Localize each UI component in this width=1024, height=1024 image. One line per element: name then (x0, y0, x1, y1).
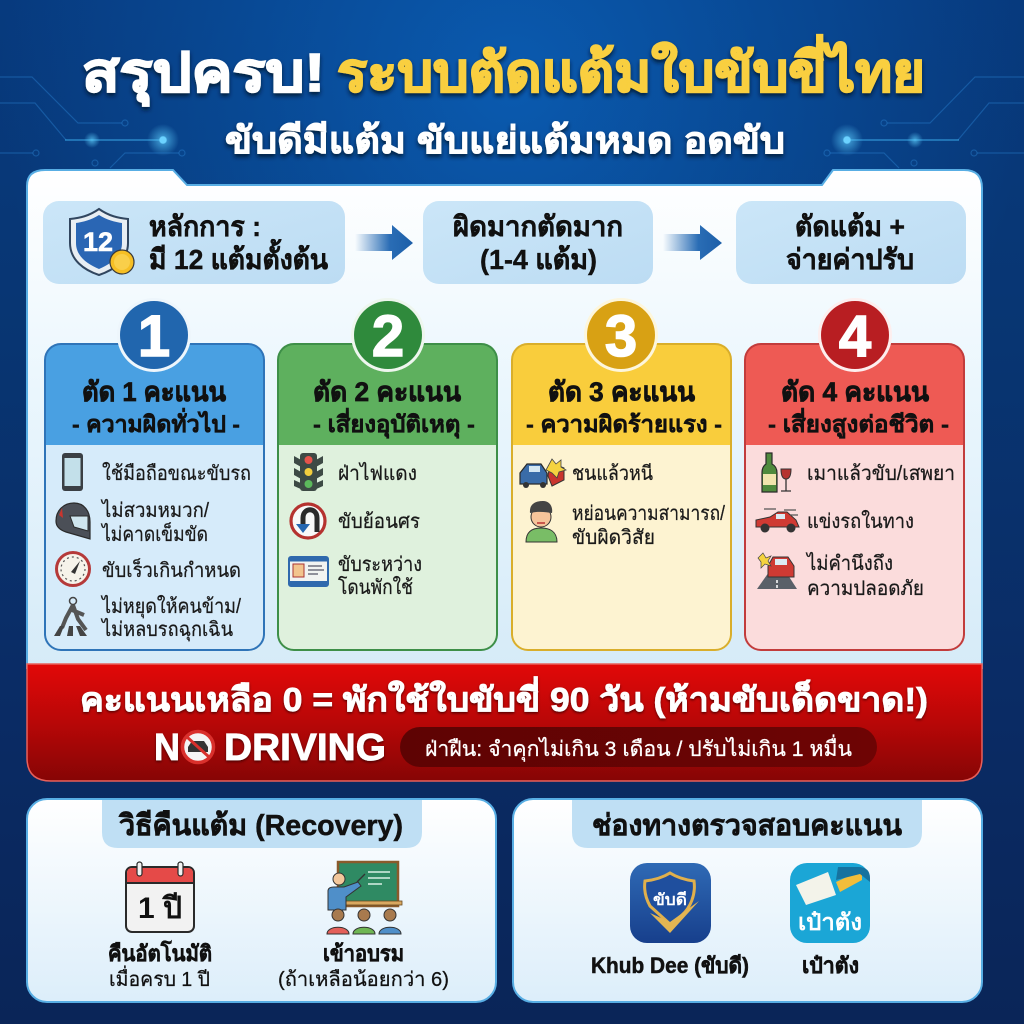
icon: license card (289, 557, 328, 586)
circuit decoration left (0, 77, 185, 168)
badge 2 (351, 298, 425, 372)
arrow 1 (355, 225, 413, 260)
icon: car crash (520, 459, 566, 488)
box: cut points and pay fine: ตัดแต้ม + (795, 211, 905, 242)
box: cut points and pay fine: จ่ายค่าปรับ (786, 244, 914, 275)
card 3: หย่อนความสามารถ/ (572, 503, 725, 525)
auto recovery label: เมื่อครบ 1 ปี (109, 965, 210, 991)
channels heading (572, 800, 922, 848)
subtitle: ขับดีมีแต้ม ขับแย่แต้มหมด อดขับ (225, 120, 785, 161)
card 4: เมาแล้วขับ/เสพยา (807, 463, 955, 485)
recovery heading (102, 800, 422, 848)
no driving sign: N (154, 727, 180, 769)
card 1: ไม่หลบรถฉุกเฉิน (100, 618, 233, 642)
badge 1: 1 (138, 304, 170, 369)
icon: speedometer (56, 552, 90, 586)
banner: zero points (27, 664, 982, 781)
badge 4 (818, 298, 892, 372)
card 1: ตัด 1 คะแนน (82, 377, 227, 407)
card 4: ไม่คำนึงถึง (805, 552, 893, 575)
principle box: มี 12 แต้มตั้งต้น (149, 238, 328, 275)
principle box: หลักการ : (149, 211, 261, 242)
icon: pedestrian crossing (54, 598, 87, 636)
icon: Paotang app (790, 863, 870, 943)
title (82, 34, 925, 107)
box: wrong more cut more (423, 201, 653, 284)
panel: check channels (513, 799, 982, 1002)
card 4: ความปลอดภัย (807, 578, 924, 600)
card 4: - เสี่ยงสูงต่อชีวิต - (768, 407, 949, 439)
icon: Khub Dee app: ขับดี (653, 890, 687, 909)
card 4: แข่งรถในทาง (807, 510, 914, 533)
banner headline: คะแนนเหลือ 0 = พักใช้ใบขับขี่ 90 วัน (ห้ามขับเด็ดขาด!) (80, 676, 928, 718)
auto recovery label: คืนอัตโนมัติ (108, 940, 212, 966)
icon: shield 12: 12 (83, 227, 113, 257)
card 3 (512, 298, 731, 650)
card 1: ขับเร็วเกินกำหนด (102, 557, 241, 582)
channels heading: ช่องทางตรวจสอบคะแนน (592, 810, 902, 842)
card 1: ไม่สวมหมวก/ (100, 499, 209, 522)
title: ระบบตัดแต้มใบขับขี่ไทย (337, 34, 925, 103)
icon: calendar: 1 ปี (138, 892, 182, 925)
badge 2: 2 (372, 304, 404, 369)
panel: main rules (27, 170, 982, 668)
arrow 2 (663, 225, 722, 260)
no driving sign (154, 727, 386, 769)
badge 3 (584, 298, 658, 372)
training label: (ถ้าเหลือน้อยกว่า 6) (278, 969, 449, 991)
icon: no car (182, 732, 214, 762)
badge 3: 3 (605, 304, 637, 369)
card 1: ไม่คาดเข็มขัด (100, 521, 208, 546)
icon: classroom (327, 862, 402, 934)
penalty pill (400, 727, 877, 767)
card 2 (278, 298, 497, 650)
box: cut points and pay fine (736, 201, 966, 284)
icon: no u-turn (291, 504, 325, 538)
card 2: โดนพักใช้ (338, 576, 413, 599)
icon: bottle and wine (762, 453, 791, 492)
card 1: ไม่หยุดให้คนข้าม/ (100, 595, 241, 619)
icon: phone (62, 453, 83, 491)
icon: helmet (56, 503, 90, 539)
card 3: ชนแล้วหนี (572, 463, 653, 485)
icon: shield 12 (70, 209, 134, 275)
card 4 (745, 298, 964, 650)
penalty pill: ฝ่าฝืน: จำคุกไม่เกิน 3 เดือน / ปรับไม่เกิน 1 หมื่น (425, 734, 852, 762)
title: สรุปครบ! (82, 43, 325, 107)
card 2: - เสี่ยงอุบัติเหตุ - (313, 407, 475, 439)
card 2: ขับย้อนศร (338, 511, 420, 533)
card 3: ขับผิดวิสัย (572, 527, 655, 549)
card 3: - ความผิดร้ายแรง - (526, 411, 722, 437)
icon: race car (756, 509, 799, 532)
card 2: ขับระหว่าง (338, 554, 422, 576)
circuit decoration right (824, 77, 1024, 168)
box: wrong more cut more: (1-4 แต้ม) (480, 244, 597, 275)
no driving sign: DRIVING (224, 727, 386, 769)
icon: traffic light (294, 453, 323, 491)
card 1: - ความผิดทั่วไป - (72, 407, 240, 437)
Khub Dee label: Khub Dee (ขับดี) (591, 953, 749, 978)
card 1 (45, 298, 264, 650)
panel: recovery (27, 799, 496, 1002)
badge 1 (117, 298, 191, 372)
icon: calendar (126, 862, 194, 932)
recovery heading: วิธีคืนแต้ม (Recovery) (118, 810, 403, 842)
card 2: ตัด 2 คะแนน (313, 377, 462, 407)
principle box (43, 201, 345, 284)
icon: reckless car (757, 553, 797, 589)
icon: Khub Dee app (630, 863, 711, 943)
Paotang label: เป๋าตัง (802, 953, 859, 978)
auto recovery label (108, 940, 212, 991)
training label (278, 941, 449, 991)
training label: เข้าอบรม (323, 941, 404, 966)
card 2: ฝ่าไฟแดง (338, 462, 417, 485)
card 3: ตัด 3 คะแนน (548, 377, 696, 407)
box: wrong more cut more: ผิดมากตัดมาก (452, 211, 623, 242)
card 1: ใช้มือถือขณะขับรถ (102, 462, 251, 485)
badge 4: 4 (839, 304, 871, 369)
icon: tired driver (526, 501, 557, 542)
card 4: ตัด 4 คะแนน (781, 377, 930, 407)
icon: Paotang app: เป๋าตัง (798, 909, 862, 935)
